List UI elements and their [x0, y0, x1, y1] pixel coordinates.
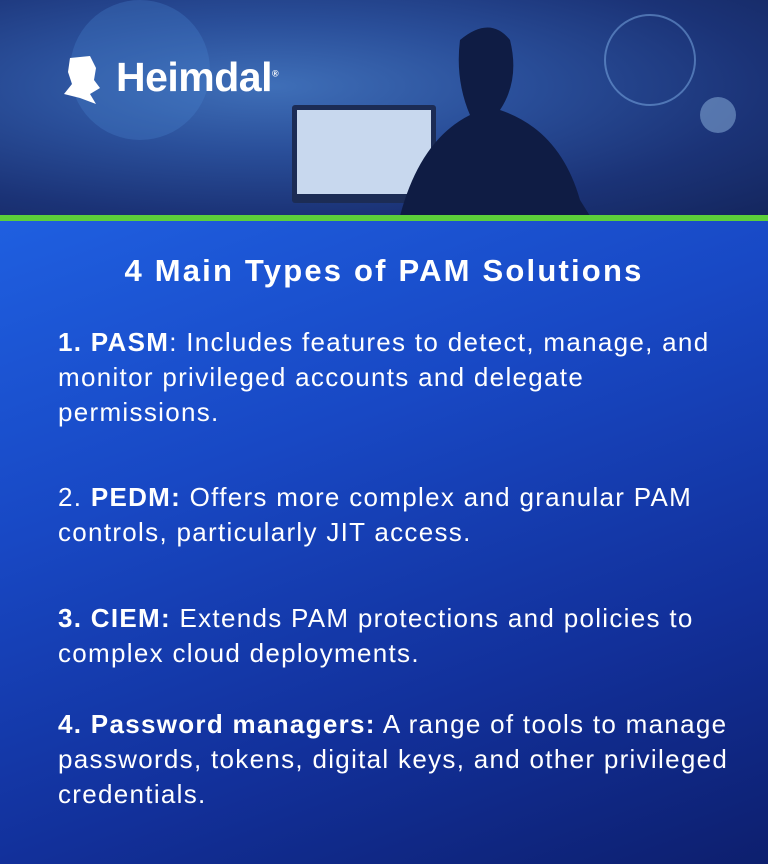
- header photo: [0, 0, 768, 216]
- item 1: monitor privileged accounts and delegate: [58, 362, 584, 392]
- item 3: complex cloud deployments.: [58, 638, 420, 668]
- item 4: credentials.: [58, 779, 207, 809]
- title: 4 Main Types of PAM Solutions: [124, 253, 644, 288]
- item 3: [58, 603, 694, 668]
- item 1: permissions.: [58, 397, 220, 427]
- item 4: 4. Password managers: A range of tools to manage: [58, 709, 727, 739]
- item 2: controls, particularly JIT access.: [58, 517, 472, 547]
- item 1: 1. PASM: Includes features to detect, manage, and: [58, 327, 709, 357]
- item 4: [58, 709, 728, 809]
- item 2: [58, 482, 692, 547]
- item 1: [58, 327, 709, 427]
- logo: Heimdal®: [116, 54, 278, 100]
- item 2: 2. PEDM: Offers more complex and granular PAM: [58, 482, 692, 512]
- logo: [64, 54, 278, 104]
- item 4: passwords, tokens, digital keys, and other privileged: [58, 744, 728, 774]
- item 3: 3. CIEM: Extends PAM protections and policies to: [58, 603, 694, 633]
